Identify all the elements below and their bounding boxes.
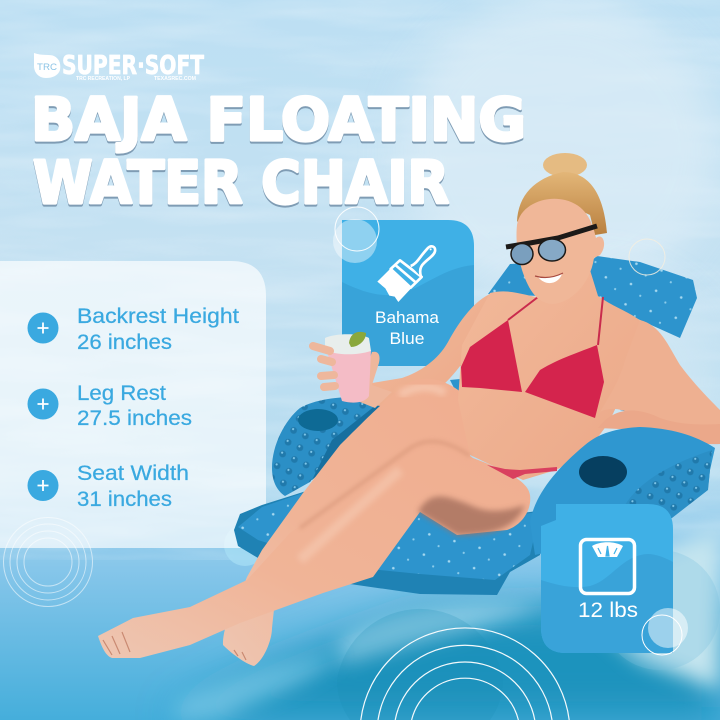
face (517, 199, 604, 304)
spec: leg rest: Leg Rest (77, 382, 166, 405)
brand logo: TEXASREC.COM (154, 76, 196, 82)
spec: seat width: Seat Width (77, 462, 189, 485)
spec panel (0, 261, 266, 566)
leg shading (103, 387, 525, 660)
label: 12 lbs: 12 lbs (578, 599, 638, 622)
title (31, 87, 526, 218)
chair: backrest (450, 256, 697, 418)
card: Bahama Blue colour (342, 220, 474, 366)
label: Bahama Blue: Blue (390, 329, 424, 348)
spec: backrest height (28, 305, 239, 354)
decorative bubble: weight card (642, 608, 688, 655)
decorative bubble: Bahama card (333, 207, 379, 263)
spec: seat width: 31 inches (77, 488, 172, 511)
ripple rings: lower left (4, 518, 92, 606)
bikini bottom (487, 465, 557, 479)
card: weight (541, 504, 673, 653)
far leg (223, 379, 470, 666)
far arm (372, 293, 500, 408)
chair: seat and arm rests (234, 397, 545, 595)
spec: leg rest: 27.5 inches (77, 407, 192, 430)
chair seat (234, 480, 545, 595)
near leg (98, 440, 530, 658)
brand logo: SUPER·SOFT (62, 50, 204, 81)
spec: backrest height: Backrest Height (77, 305, 239, 328)
label: Bahama Blue (375, 308, 440, 348)
hand and drink (313, 332, 392, 408)
brand logo: TRC RECREATION, LP (76, 76, 131, 82)
hair (517, 153, 607, 235)
ripple rings: bottom centre (361, 628, 569, 720)
title: BAJA FLOATING (31, 87, 526, 155)
chair: right arm rest (530, 427, 715, 555)
near forearm (598, 410, 720, 444)
label: Bahama Blue: Bahama (375, 308, 440, 327)
near arm (600, 320, 720, 444)
spec: leg rest (28, 382, 192, 430)
sunglasses (506, 226, 597, 264)
spec: seat width (28, 462, 189, 511)
icon: weighing scale (580, 540, 634, 594)
woman (98, 153, 720, 666)
title: WATER CHAIR (33, 150, 449, 218)
torso (458, 270, 642, 480)
decorative ring: chair back (629, 239, 665, 275)
cup holder (579, 456, 627, 488)
icon: paintbrush (377, 246, 435, 302)
left arm rest (272, 397, 400, 496)
brand logo: TRC (37, 62, 58, 72)
bikini top (461, 297, 604, 418)
spec: backrest height: 26 inches (77, 331, 172, 354)
